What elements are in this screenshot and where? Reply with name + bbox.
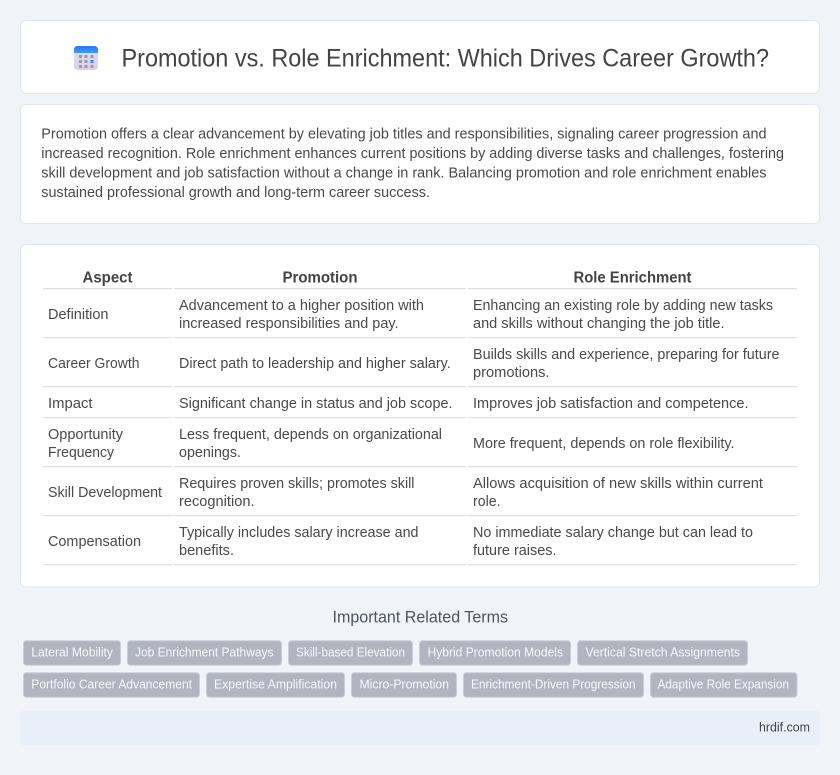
heading: important related terms: Important Related Terms xyxy=(332,609,508,627)
tag: lateral mobility xyxy=(24,641,120,665)
tag: enrichment-driven progression xyxy=(464,673,644,697)
row: compensation: No immediate salary change but can lead to xyxy=(473,525,753,541)
tag: job enrichment pathways: Job Enrichment Pathways xyxy=(135,646,274,660)
tag: job enrichment pathways xyxy=(128,641,282,665)
row: skill development xyxy=(48,476,763,510)
panel: title header xyxy=(20,20,820,94)
tag: micro-promotion: Micro-Promotion xyxy=(360,678,449,692)
description text: skill development and job satisfaction without a change in rank. Balancing promotion and role enrichment enables xyxy=(41,164,767,182)
panel: comparison table xyxy=(20,244,820,587)
tag: skill-based elevation xyxy=(288,641,412,665)
tag: hybrid promotion models xyxy=(420,641,570,665)
row: career growth: promotions. xyxy=(473,365,550,381)
tag: lateral mobility: Lateral Mobility xyxy=(31,646,114,660)
panel: description xyxy=(20,104,820,224)
row: opportunity frequency: Less frequent, depends on organizational xyxy=(179,427,442,443)
tag: vertical stretch assignments xyxy=(578,641,748,665)
row: opportunity frequency xyxy=(48,427,734,461)
row: compensation: future raises. xyxy=(473,543,556,559)
row: skill development: recognition. xyxy=(179,494,254,510)
row: definition: and skills without changing the job title. xyxy=(473,316,724,332)
table header row: Aspect xyxy=(82,270,132,287)
tag: vertical stretch assignments: Vertical Stretch Assignments xyxy=(586,646,740,660)
row: compensation: Typically includes salary increase and xyxy=(179,525,418,541)
table header row: Role Enrichment xyxy=(574,270,692,287)
title: Promotion vs. Role Enrichment: Which Drives Career Growth? xyxy=(122,45,769,73)
footer site name: hrdif.com xyxy=(759,720,810,735)
row: career growth xyxy=(48,347,780,381)
tag: adaptive role expansion xyxy=(650,673,797,697)
tag: skill-based elevation: Skill-based Elevation xyxy=(296,646,405,660)
footer xyxy=(20,711,820,745)
row: opportunity frequency: More frequent, depends on role flexibility. xyxy=(473,436,734,452)
icon: calendar xyxy=(74,46,98,70)
row: career growth: Direct path to leadership and higher salary. xyxy=(179,356,451,372)
row: skill development: Skill Development xyxy=(48,485,162,501)
row: compensation: Compensation xyxy=(48,534,141,550)
row: compensation xyxy=(48,525,753,559)
tag: enrichment-driven progression: Enrichment-Driven Progression xyxy=(471,678,636,692)
row: definition: Enhancing an existing role by adding new tasks xyxy=(473,298,773,314)
row: skill development: Requires proven skills; promotes skill xyxy=(179,476,414,492)
row: definition: Definition xyxy=(48,307,108,323)
tag: expertise amplification: Expertise Amplification xyxy=(214,678,337,692)
description text xyxy=(41,126,784,201)
description text: increased recognition. Role enrichment enhances current positions by adding diverse tasks and challenges, fostering xyxy=(41,145,784,162)
description text: Promotion offers a clear advancement by elevating job titles and responsibilities, signaling career progression and xyxy=(41,126,767,142)
row: definition xyxy=(48,298,773,332)
row: impact: Significant change in status and job scope. xyxy=(179,396,452,412)
row: opportunity frequency: Frequency xyxy=(48,445,115,461)
tag: expertise amplification xyxy=(206,673,344,697)
row: opportunity frequency: openings. xyxy=(179,445,241,461)
table header row: Promotion xyxy=(282,270,358,287)
row: definition: increased responsibilities and pay. xyxy=(179,316,398,332)
row: opportunity frequency: Opportunity xyxy=(48,427,124,443)
description text: sustained professional growth and long-term career success. xyxy=(41,184,430,201)
tag: micro-promotion xyxy=(352,673,456,697)
row: career growth: Career Growth xyxy=(48,356,140,372)
row: impact: Impact xyxy=(48,396,92,412)
tag: portfolio career advancement xyxy=(24,673,200,697)
table header row xyxy=(82,270,692,287)
row: impact xyxy=(48,396,748,412)
row: skill development: Allows acquisition of new skills within current xyxy=(473,476,763,492)
row: compensation: benefits. xyxy=(179,543,234,559)
row: definition: Advancement to a higher position with xyxy=(179,298,424,314)
row: skill development: role. xyxy=(473,494,500,510)
tag: hybrid promotion models: Hybrid Promotion Models xyxy=(428,646,563,660)
row: career growth: Builds skills and experience, preparing for future xyxy=(473,347,780,363)
related term tags xyxy=(24,641,797,697)
tag: portfolio career advancement: Portfolio Career Advancement xyxy=(31,678,192,692)
row: impact: Improves job satisfaction and competence. xyxy=(473,396,748,412)
tag: adaptive role expansion: Adaptive Role Expansion xyxy=(658,678,789,692)
